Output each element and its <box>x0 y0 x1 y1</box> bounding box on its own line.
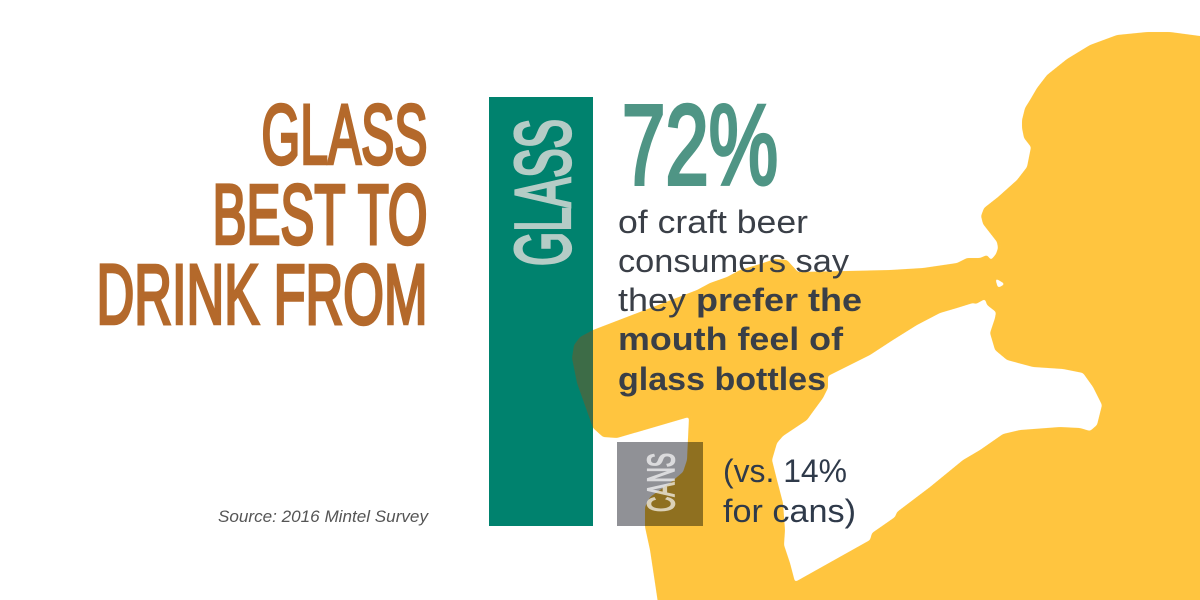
source note: Source: 2016 Mintel Survey <box>218 507 429 526</box>
panel: cans box <box>617 442 703 526</box>
title: DRINK FROM <box>96 248 428 342</box>
title: BEST TO <box>212 168 428 262</box>
big statistic: 72% <box>622 82 778 208</box>
cans box label: CANS <box>641 453 683 512</box>
glass bar label: GLASS <box>498 119 586 266</box>
statistic description <box>618 204 862 397</box>
cans comparison text: (vs. 14% <box>723 453 847 489</box>
title: GLASS <box>262 88 428 182</box>
panel: glass bar <box>489 97 593 526</box>
drinker silhouette with bottle <box>572 32 1200 600</box>
cans comparison text: for cans) <box>723 493 856 529</box>
title <box>96 88 428 342</box>
statistic description: of craft beer <box>618 204 808 240</box>
statistic description: glass bottles <box>618 361 826 397</box>
cans comparison text <box>723 453 856 529</box>
statistic description: prefer the <box>696 282 862 318</box>
statistic description: they <box>618 282 686 318</box>
statistic description: consumers say <box>618 243 849 279</box>
statistic description: mouth feel of <box>618 321 843 357</box>
